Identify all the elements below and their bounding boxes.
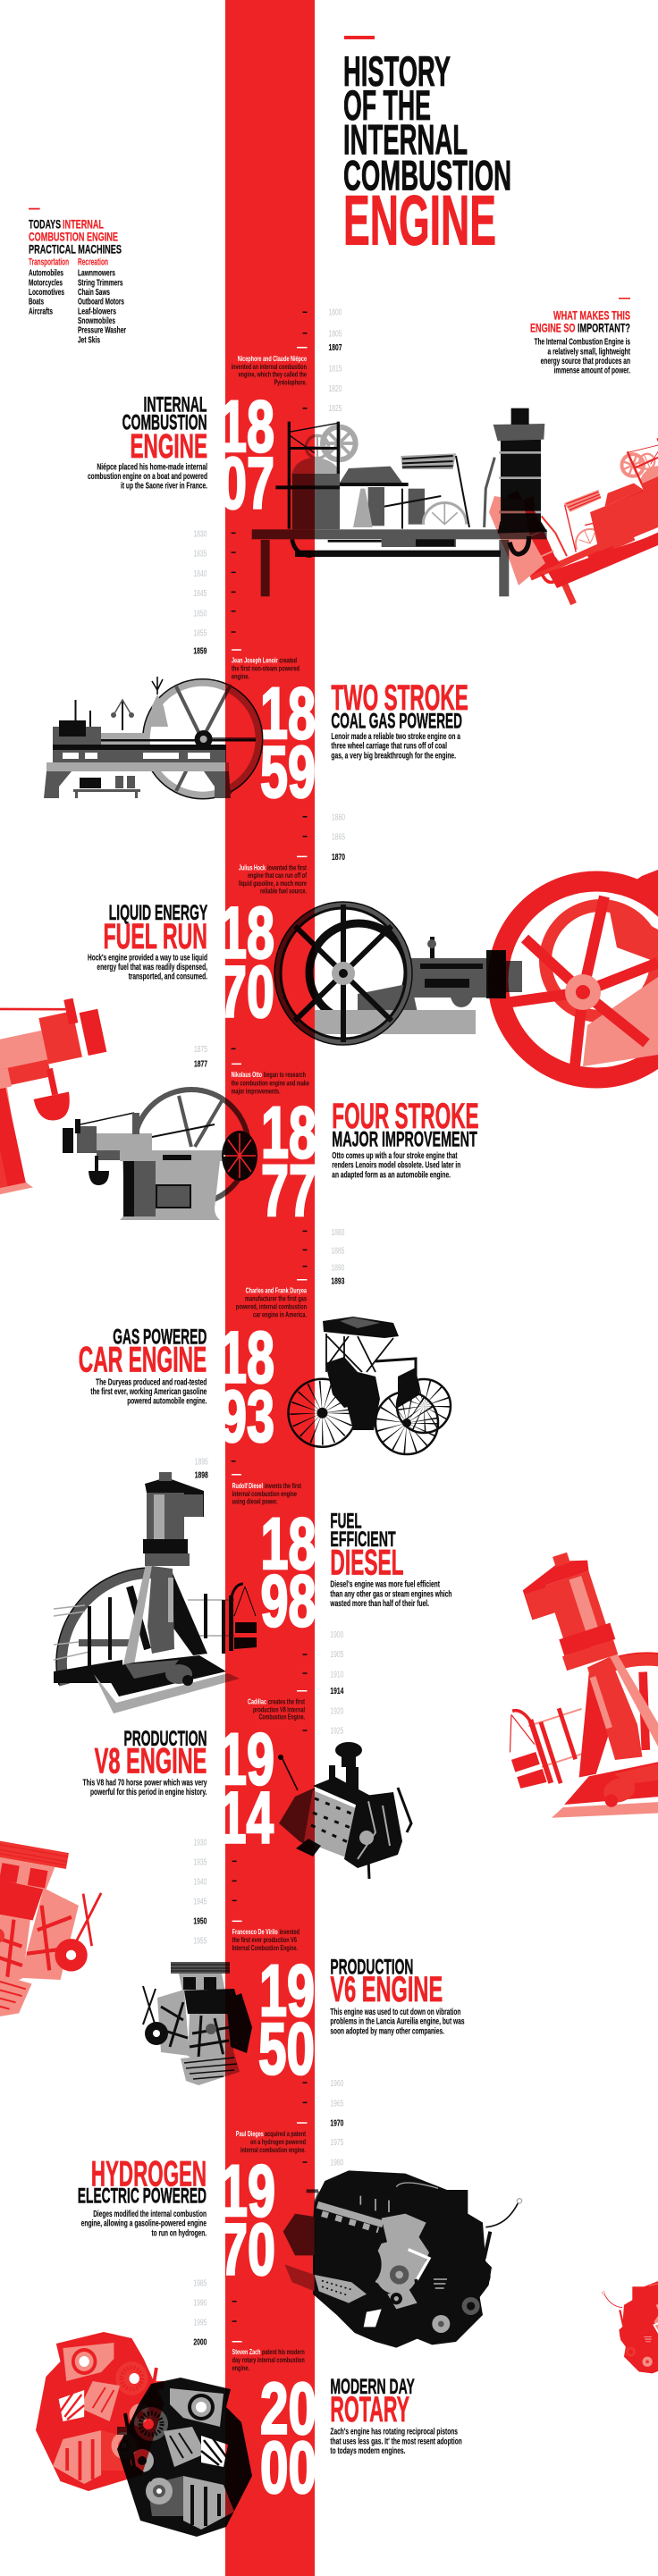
1870 event note: Julius Hock bbox=[239, 863, 266, 871]
timeline years 1830 to 1859: 1835 bbox=[193, 550, 207, 560]
timeline years 1930 to 1955: 1945 bbox=[193, 1898, 207, 1907]
recreation list: Leaf-blowers bbox=[78, 307, 116, 316]
timeline years 1875 to 1877: 1875 bbox=[194, 1045, 207, 1055]
year 1950: 50 bbox=[258, 2008, 315, 2090]
timeline years 1900 to 1925: 1900 bbox=[330, 1630, 344, 1640]
timeline years 1960 to 1980: 1975 bbox=[330, 2138, 343, 2148]
1950 event note: Internal Combustion Engine. bbox=[232, 1943, 298, 1952]
1870 body text: energy fuel that was readily dispensed, bbox=[97, 963, 207, 972]
timeline years 1830 to 1859: 1840 bbox=[193, 569, 207, 579]
1859 body text: gas, a very big breakthrough for the engine. bbox=[331, 751, 456, 761]
1970 body text: to run on hydrogen. bbox=[152, 2228, 207, 2238]
1859 event note: Jean Joseph Lenoir bbox=[232, 655, 278, 664]
2000 event note: day rotary internal combustion bbox=[232, 2355, 305, 2364]
timeline years 1800 to 1825: 1807 bbox=[329, 343, 342, 353]
timeline years 1930 to 1955: 1930 bbox=[193, 1838, 207, 1848]
1870 event note: invented the first bbox=[267, 863, 307, 871]
2000 body text: to todays modern engines. bbox=[330, 2446, 406, 2456]
1807 body text: Niépce placed his home-made internal bbox=[97, 462, 207, 472]
1950 body text bbox=[330, 2008, 465, 2036]
1898 event note: Rudolf Diesel bbox=[232, 1481, 263, 1490]
year 1970 bbox=[220, 2151, 275, 2290]
panel: 1970 bbox=[78, 2079, 658, 2375]
1914 event note bbox=[248, 1697, 305, 1721]
1870 body text: Hock's engine provided a way to use liquid bbox=[88, 953, 207, 963]
timeline years 1985 to 2000: 1995 bbox=[193, 2319, 207, 2328]
timeline years 1800 to 1825: 1805 bbox=[329, 330, 342, 340]
1893 heading: GAS POWERED bbox=[113, 1326, 207, 1350]
1893 heading: CAR ENGINE bbox=[79, 1341, 207, 1380]
1914 body text bbox=[82, 1778, 207, 1797]
year 2000 bbox=[260, 2369, 316, 2508]
title: HISTORY bbox=[343, 47, 451, 95]
1898 heading: EFFICIENT bbox=[330, 1528, 396, 1552]
engine illustration 1898 bbox=[54, 1472, 257, 1713]
transportation list: Locomotives bbox=[29, 288, 64, 298]
1914 body text: powerful for this period in engine history. bbox=[90, 1788, 207, 1797]
1950 heading: PRODUCTION bbox=[330, 1956, 413, 1980]
timeline years 1960 to 1980 bbox=[297, 2079, 344, 2168]
timeline years 1930 to 1955 bbox=[193, 1838, 242, 1947]
1914 event note: Combustion Engine. bbox=[259, 1712, 305, 1721]
panel: 2000 bbox=[36, 2278, 462, 2537]
1893 event note: powered, internal combustion bbox=[236, 1302, 307, 1311]
year 1807: 07 bbox=[219, 442, 274, 524]
1970 event note: acquired a patent bbox=[265, 2129, 306, 2138]
1898 heading bbox=[330, 1509, 404, 1583]
1970 event note: Paul Dieges bbox=[236, 2129, 264, 2138]
red engine copy 1970 bbox=[603, 2276, 658, 2375]
panel: 1950 bbox=[0, 1833, 465, 2090]
year 1914 bbox=[219, 1719, 274, 1859]
practical machines heading bbox=[29, 216, 122, 256]
1870 event note: reliable fuel source. bbox=[260, 887, 307, 896]
1870 body text: transported, and consumed. bbox=[129, 972, 207, 982]
1870 event note: liquid gasoline, a much more bbox=[239, 879, 307, 888]
1877 event note: Nikolaus Otto bbox=[232, 1070, 262, 1079]
1807 event note: invented an internal combustion bbox=[232, 362, 307, 371]
practical machines heading: PRACTICAL MACHINES bbox=[29, 241, 122, 256]
1893 event note: Charles and Frank Duryea bbox=[246, 1286, 307, 1295]
year 1807 bbox=[219, 386, 274, 524]
year 1859 bbox=[260, 673, 316, 813]
transportation list: Aircrafts bbox=[29, 307, 53, 316]
engine illustration 1859 bbox=[44, 677, 263, 799]
timeline years 1800 to 1825: 1800 bbox=[329, 308, 342, 318]
timeline years 1900 to 1925: 1905 bbox=[330, 1650, 343, 1660]
timeline years 1960 to 1980: 1980 bbox=[330, 2159, 344, 2168]
1950 heading bbox=[330, 1956, 443, 2009]
2000 event note bbox=[232, 2347, 305, 2372]
timeline years 1985 to 2000: 1990 bbox=[193, 2298, 207, 2308]
1807 heading: INTERNAL bbox=[143, 393, 207, 417]
1807 heading: ENGINE bbox=[131, 428, 207, 466]
timeline years 1860 to 1870: 1865 bbox=[332, 832, 345, 842]
timeline years 1895 to 1898: 1898 bbox=[195, 1471, 208, 1481]
2000 heading: ROTARY bbox=[330, 2390, 409, 2429]
year 2000: 20 bbox=[260, 2369, 316, 2450]
1898 body text bbox=[330, 1580, 452, 1609]
timeline years 1960 to 1980: 1960 bbox=[330, 2079, 344, 2089]
transportation list: Motorcycles bbox=[29, 278, 63, 288]
timeline years 1860 to 1870: 1860 bbox=[332, 812, 345, 822]
year 1859: 59 bbox=[260, 732, 316, 813]
1877 event note: the combustion engine and make bbox=[232, 1078, 309, 1087]
timeline years 1985 to 2000: 1985 bbox=[193, 2278, 207, 2288]
1859 heading: TWO STROKE bbox=[331, 678, 468, 718]
engine illustration 1877 bbox=[63, 1090, 257, 1220]
1893 body text: the first ever, working American gasoline bbox=[90, 1387, 207, 1397]
timeline years 1830 to 1859: 1850 bbox=[193, 609, 207, 619]
title: INTERNAL bbox=[343, 116, 468, 164]
timeline years 1900 to 1925: 1914 bbox=[330, 1687, 344, 1696]
engine illustration 1914 bbox=[278, 1742, 411, 1879]
year 1877: 77 bbox=[261, 1150, 316, 1232]
panel: what makes this engine so important: IMPORTANT? bbox=[578, 321, 630, 335]
recreation list: Chain Saws bbox=[78, 288, 110, 298]
1950 body text: problems in the Lancia Aureilia engine, but was bbox=[330, 2017, 465, 2027]
timeline years 1960 to 1980: 1965 bbox=[330, 2099, 343, 2109]
timeline years 1875 to 1877 bbox=[194, 1045, 241, 1070]
1950 heading: V6 ENGINE bbox=[330, 1970, 443, 2009]
timeline years 1930 to 1955: 1955 bbox=[193, 1937, 207, 1947]
recreation list: Jet Skis bbox=[78, 335, 100, 345]
1898 body text: Diesel's engine was more fuel efficient bbox=[330, 1580, 440, 1590]
1877 heading: MAJOR IMPROVEMENT bbox=[332, 1127, 477, 1151]
1859 event note: the first non-steam powered bbox=[232, 663, 299, 672]
1807 heading: COMBUSTION bbox=[122, 411, 207, 435]
1914 event note: production V8 Internal bbox=[253, 1705, 305, 1714]
timeline years 1880 to 1893: 1880 bbox=[331, 1228, 345, 1238]
timeline years 1880 to 1893 bbox=[297, 1228, 345, 1286]
year 1950 bbox=[258, 1950, 315, 2090]
year 1914: 19 bbox=[219, 1719, 274, 1800]
panel: 1877 bbox=[0, 943, 479, 1237]
recreation list: Pressure Washer bbox=[78, 326, 126, 336]
transportation list: Automobiles bbox=[29, 269, 63, 279]
1877 body text: renders Lenoirs model obsolete. Used later in bbox=[332, 1161, 460, 1171]
panel: 1807 bbox=[88, 308, 658, 616]
timeline years 1895 to 1898 bbox=[195, 1457, 241, 1481]
timeline years 1830 to 1859: 1845 bbox=[193, 589, 207, 599]
recreation list bbox=[78, 257, 126, 345]
1893 body text: powered automobile engine. bbox=[127, 1397, 207, 1407]
engine illustration 1950 bbox=[143, 1962, 252, 2085]
1870 body text bbox=[88, 953, 207, 982]
year 1970: 70 bbox=[220, 2209, 275, 2290]
1877 event note: major improvements. bbox=[232, 1086, 281, 1095]
1970 body text bbox=[81, 2210, 207, 2238]
1970 heading bbox=[78, 2155, 207, 2209]
timeline years 1880 to 1893: 1890 bbox=[331, 1263, 345, 1273]
engine illustration 1807 bbox=[252, 408, 547, 596]
1914 heading: V8 ENGINE bbox=[95, 1742, 207, 1781]
panel: 1893 bbox=[79, 1228, 451, 1457]
1877 event note bbox=[232, 1070, 309, 1095]
1859 heading: COAL GAS POWERED bbox=[331, 709, 462, 733]
timeline years 1860 to 1870 bbox=[297, 812, 345, 863]
2000 event note: patent his modern bbox=[262, 2347, 305, 2356]
timeline years 1930 to 1955: 1950 bbox=[193, 1917, 207, 1927]
year 1859: 18 bbox=[260, 673, 316, 754]
timeline years 1830 to 1859: 1855 bbox=[193, 628, 207, 638]
1914 event note: Cadillac bbox=[248, 1697, 266, 1706]
title bbox=[343, 36, 511, 259]
1898 heading: FUEL bbox=[330, 1509, 362, 1533]
transportation list: Transportation bbox=[29, 257, 69, 268]
year 1877: 18 bbox=[261, 1092, 316, 1174]
year 1893 bbox=[219, 1317, 274, 1457]
1870 event note: engine that can run off of bbox=[248, 871, 307, 880]
1859 body text: Lenoir made a reliable two stroke engine on a bbox=[331, 732, 460, 742]
2000 event note: engine. bbox=[232, 2363, 249, 2372]
1893 body text: The Duryeas produced and road-tested bbox=[96, 1377, 207, 1387]
1898 body text: wasted more than half of their fuel. bbox=[330, 1599, 429, 1609]
2000 event note: Steven Zach bbox=[232, 2347, 261, 2356]
panel: practical machines bbox=[29, 208, 126, 345]
timeline years 1900 to 1925: 1910 bbox=[330, 1670, 344, 1679]
1893 heading bbox=[79, 1326, 207, 1380]
year 1870: 18 bbox=[219, 893, 274, 974]
1870 heading: FUEL RUN bbox=[104, 917, 207, 956]
recreation list: String Trimmers bbox=[78, 278, 123, 288]
recreation list: Recreation bbox=[78, 257, 108, 268]
1898 event note: internal combustion engine bbox=[232, 1489, 297, 1498]
red engine copy 1877 bbox=[0, 943, 131, 1237]
timeline years 1930 to 1955: 1940 bbox=[193, 1877, 207, 1887]
1893 event note: manufacturer the first gas bbox=[245, 1294, 307, 1303]
transportation list bbox=[29, 257, 69, 316]
1970 event note: on a hydrogen powered bbox=[250, 2137, 306, 2146]
year 1898: 98 bbox=[261, 1561, 316, 1642]
1807 heading bbox=[122, 393, 207, 466]
1950 body text: soon adopted by many other companies. bbox=[330, 2026, 444, 2036]
timeline years 1800 to 1825 bbox=[297, 308, 342, 414]
title: COMBUSTION bbox=[343, 151, 511, 198]
red engine copy 1870 bbox=[498, 870, 658, 1078]
timeline years 1930 to 1955: 1935 bbox=[193, 1857, 207, 1867]
year 1970: 19 bbox=[220, 2151, 275, 2232]
timeline years 1830 to 1859: 1859 bbox=[193, 647, 207, 657]
panel: 1870 bbox=[88, 812, 658, 1078]
1970 body text: Dieges modified the internal combustion bbox=[93, 2210, 207, 2219]
1877 heading: FOUR STROKE bbox=[332, 1097, 479, 1136]
timeline years 1880 to 1893: 1885 bbox=[331, 1247, 344, 1257]
year 1877 bbox=[261, 1092, 316, 1232]
year 1870 bbox=[219, 893, 274, 1033]
carriage illustration 1893 bbox=[288, 1317, 451, 1454]
1807 body text bbox=[88, 462, 207, 492]
1877 body text: an adapted form as an automobile engine. bbox=[332, 1170, 451, 1180]
year 1893: 93 bbox=[219, 1376, 274, 1457]
1893 event note bbox=[236, 1286, 307, 1319]
1914 heading: PRODUCTION bbox=[123, 1727, 207, 1751]
1877 event note: began to research bbox=[264, 1070, 306, 1079]
practical machines heading: TODAYS bbox=[29, 216, 61, 231]
timeline years 1985 to 2000 bbox=[193, 2278, 242, 2348]
year 2000: 00 bbox=[260, 2427, 316, 2508]
title: ENGINE bbox=[343, 180, 496, 259]
1950 event note bbox=[232, 1927, 299, 1952]
transportation list: Boats bbox=[29, 298, 44, 307]
red engine copy 1807 bbox=[489, 420, 658, 616]
1970 event note: internal combustion engine. bbox=[240, 2145, 306, 2154]
2000 heading: MODERN DAY bbox=[330, 2375, 415, 2399]
panel: what makes this engine so important bbox=[530, 298, 630, 376]
1914 body text: This V8 had 70 horse power which was very bbox=[82, 1778, 207, 1788]
1950 event note: the first ever production V6 bbox=[232, 1935, 297, 1944]
1870 event note bbox=[239, 863, 307, 896]
timeline years 1960 to 1980: 1970 bbox=[330, 2118, 343, 2128]
1914 heading bbox=[95, 1727, 207, 1781]
1877 body text: Otto comes up with a four stroke engine that bbox=[332, 1151, 458, 1161]
1859 body text bbox=[331, 732, 460, 761]
1898 body text: than any other gas or steam engines which bbox=[330, 1589, 452, 1599]
1970 body text: engine, allowing a gasoline-powered engine bbox=[81, 2219, 207, 2229]
1859 heading bbox=[331, 678, 468, 733]
1898 heading: DIESEL bbox=[330, 1544, 404, 1583]
year 1893: 18 bbox=[219, 1317, 274, 1399]
1807 body text: combustion engine on a boat and powered bbox=[88, 472, 207, 482]
panel: 1859 bbox=[44, 530, 468, 813]
recreation list: Snowmobiles bbox=[78, 316, 115, 326]
engine illustration 1870 bbox=[274, 902, 522, 1045]
panel: 1914 bbox=[82, 1630, 411, 1879]
2000 body text bbox=[330, 2428, 462, 2456]
1893 event note: car engine in America. bbox=[253, 1310, 307, 1319]
1950 event note: Francesco De Virilo bbox=[232, 1927, 278, 1936]
1877 heading bbox=[332, 1097, 479, 1151]
year 1898 bbox=[261, 1503, 316, 1642]
2000 heading bbox=[330, 2375, 415, 2429]
practical machines heading: INTERNAL bbox=[63, 216, 104, 231]
timeline years 1830 to 1859 bbox=[193, 530, 241, 657]
timeline years 1800 to 1825: 1815 bbox=[329, 365, 342, 375]
timeline years 1900 to 1925 bbox=[297, 1630, 344, 1736]
1807 body text: it up the Saone river in France. bbox=[121, 482, 207, 492]
1877 body text bbox=[332, 1151, 460, 1180]
engine illustration 2000 bbox=[117, 2378, 252, 2537]
central red timeline bar bbox=[225, 0, 315, 2576]
1970 heading: ELECTRIC POWERED bbox=[78, 2185, 207, 2209]
year 1898: 18 bbox=[261, 1503, 316, 1585]
timeline years 1900 to 1925: 1920 bbox=[330, 1706, 344, 1716]
1950 event note: invented bbox=[279, 1927, 299, 1936]
timeline years 1985 to 2000: 2000 bbox=[193, 2338, 207, 2348]
1807 event note bbox=[232, 354, 307, 387]
title: OF THE bbox=[343, 81, 431, 129]
timeline years 1800 to 1825: 1825 bbox=[329, 404, 342, 414]
1859 event note bbox=[232, 655, 299, 680]
timeline years 1880 to 1893: 1893 bbox=[331, 1276, 345, 1286]
red engine copy 2000 bbox=[36, 2332, 164, 2491]
1893 body text bbox=[90, 1377, 207, 1407]
1859 body text: three wheel carriage that runs off of coal bbox=[331, 742, 447, 752]
timeline years 1900 to 1925: 1925 bbox=[330, 1726, 343, 1736]
1970 event note bbox=[236, 2129, 306, 2154]
2000 body text: Zach's engine has rotating reciprocal pistons bbox=[330, 2428, 458, 2437]
year 1807: 18 bbox=[219, 386, 274, 467]
year 1870: 70 bbox=[219, 952, 274, 1033]
1859 event note: engine. bbox=[232, 671, 249, 680]
1914 event note: creates the first bbox=[268, 1697, 305, 1706]
1859 event note: created bbox=[279, 655, 297, 664]
engine illustration 1970 bbox=[283, 2170, 522, 2348]
2000 body text: that uses less gas. It' the most resent adoption bbox=[330, 2437, 462, 2446]
1807 event note: Nicephore and Claude Niépce bbox=[238, 354, 307, 363]
timeline years 1800 to 1825: 1820 bbox=[329, 384, 342, 394]
1950 body text: This engine was used to cut down on vibration bbox=[330, 2008, 460, 2017]
red engine copy 1950 bbox=[0, 1833, 107, 2030]
year 1914: 14 bbox=[219, 1778, 274, 1859]
timeline years 1860 to 1870: 1870 bbox=[332, 853, 345, 863]
1970 heading: HYDROGEN bbox=[91, 2155, 207, 2194]
timeline years 1875 to 1877: 1877 bbox=[194, 1060, 207, 1070]
recreation list: Lawnmowers bbox=[78, 269, 115, 279]
1807 event note: engine, which they called the bbox=[239, 370, 307, 379]
recreation list: Outboard Motors bbox=[78, 298, 124, 307]
1870 heading: LIQUID ENERGY bbox=[109, 901, 207, 925]
1807 event note: Pyréolophore. bbox=[274, 378, 307, 387]
red engine copy 1898 bbox=[456, 1513, 658, 1864]
panel: 1898 bbox=[54, 1457, 658, 1864]
panel: what makes this engine so important: ENGINE SO bbox=[530, 321, 576, 335]
1898 event note: invents the first bbox=[265, 1481, 301, 1490]
year 1950: 19 bbox=[259, 1950, 315, 2032]
timeline years 1830 to 1859: 1830 bbox=[193, 530, 207, 540]
1898 event note bbox=[232, 1481, 301, 1506]
timeline years 1895 to 1898: 1895 bbox=[195, 1457, 208, 1467]
1870 heading bbox=[104, 901, 207, 956]
1898 event note: using diesel power. bbox=[232, 1497, 278, 1506]
practical machines heading: COMBUSTION ENGINE bbox=[29, 229, 118, 243]
